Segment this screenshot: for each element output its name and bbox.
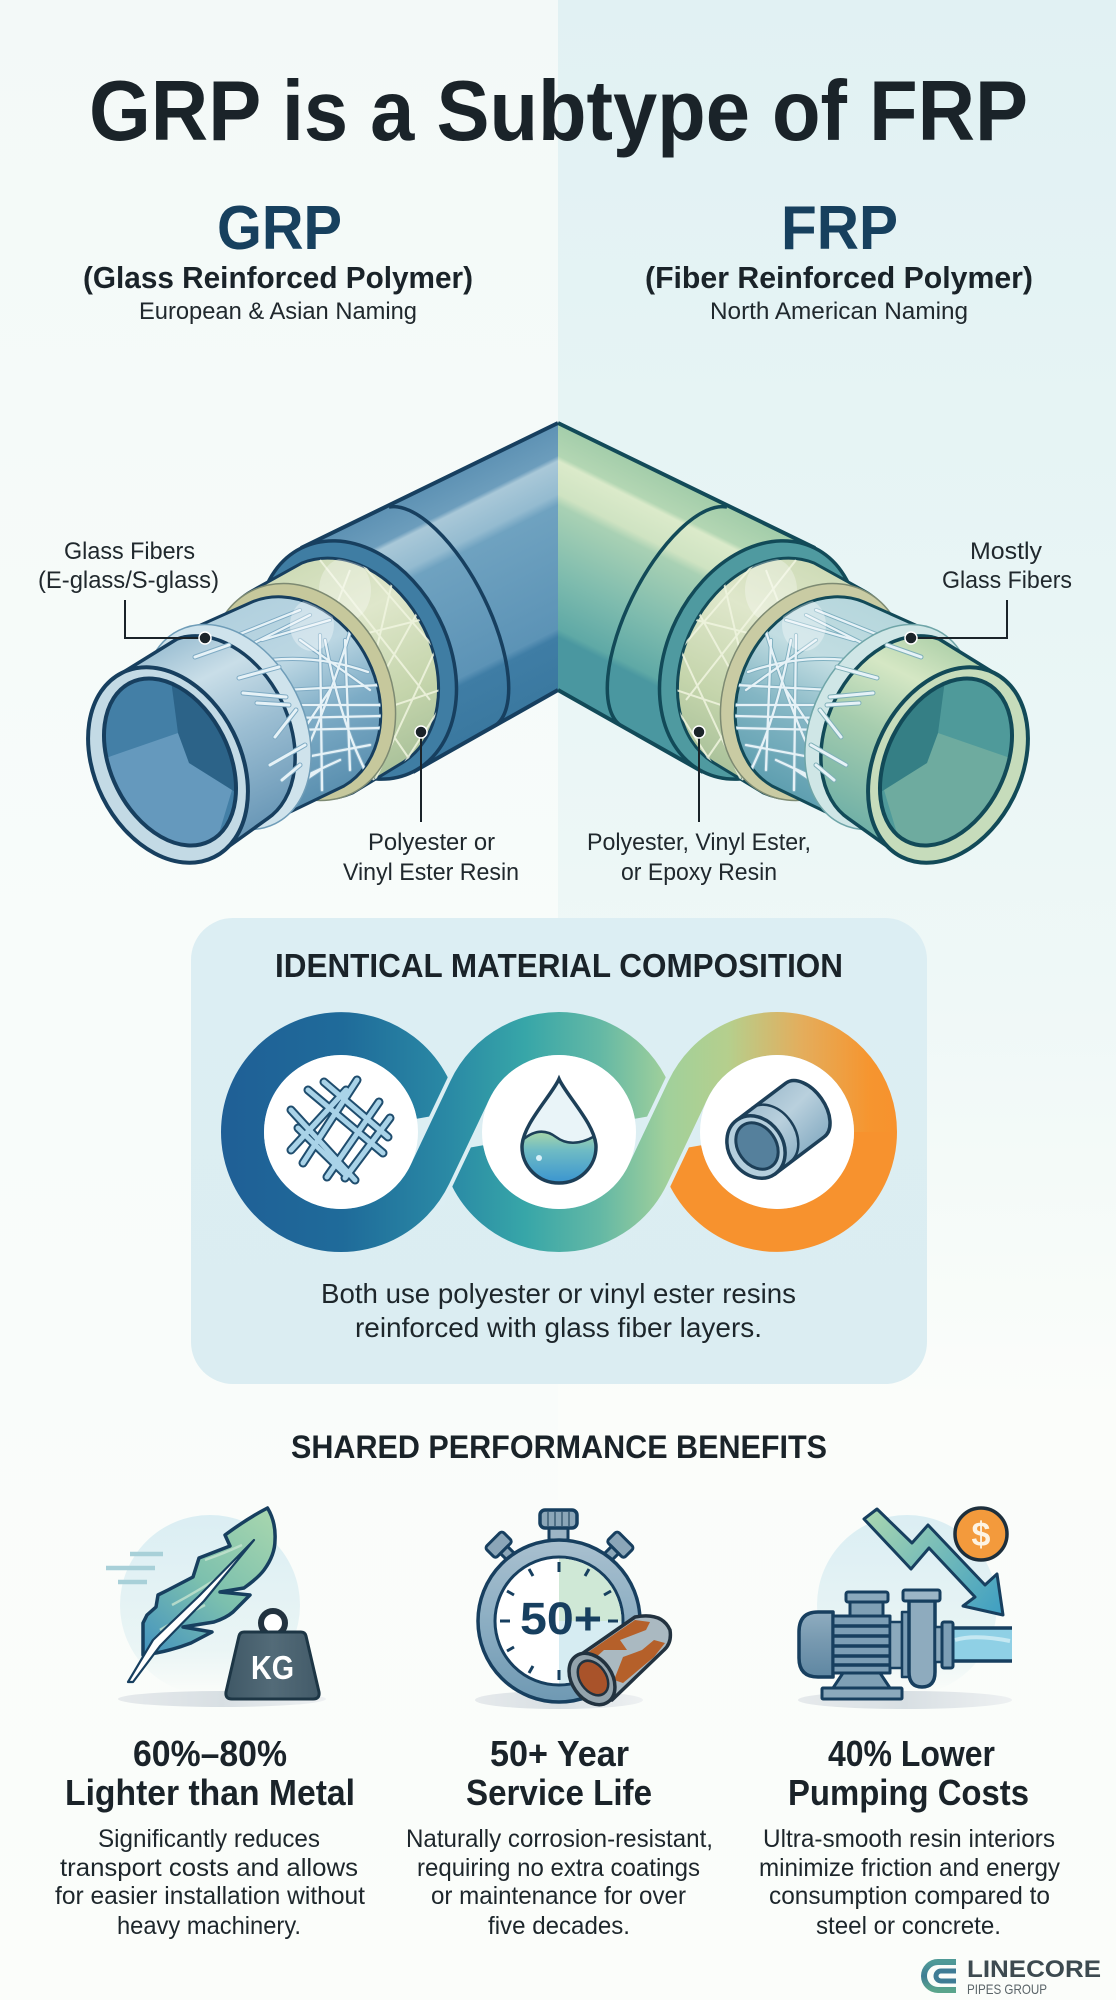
benefit: lighter than metal: Lighter than Metal <box>65 1772 355 1813</box>
icon: pipe <box>700 1055 854 1209</box>
benefit: lighter than metal: heavy machinery. <box>117 1912 301 1940</box>
icon: pump with falling cost arrow: $ <box>972 1516 991 1554</box>
callout: GRP resin <box>343 726 519 886</box>
callout: GRP resin: Vinyl Ester Resin <box>343 859 519 886</box>
benefit: service life: five decades. <box>488 1912 630 1940</box>
heading block: FRP: FRP <box>781 194 898 263</box>
benefit: service life: Naturally corrosion-resistant, <box>406 1825 713 1853</box>
logo: Linecore Pipes Group: LINECORE <box>967 1956 1101 1983</box>
benefit: service life: Service Life <box>466 1772 652 1813</box>
heading block: GRP: GRP <box>217 194 342 263</box>
benefit: pumping costs: Pumping Costs <box>788 1772 1029 1813</box>
panel heading: IDENTICAL MATERIAL COMPOSITION <box>275 947 843 984</box>
benefit: pumping costs: steel or concrete. <box>816 1912 1001 1940</box>
icon: feather and weight: KG <box>251 1649 294 1686</box>
benefit: lighter than metal: transport costs and allows <box>60 1854 358 1882</box>
benefit: service life: 50+ Year <box>490 1733 629 1774</box>
icon: feather and weight <box>106 1508 326 1707</box>
panel caption: reinforced with glass fiber layers. <box>355 1312 762 1343</box>
callout: GRP resin: Polyester or <box>368 829 495 856</box>
panel caption: Both use polyester or vinyl ester resins <box>321 1278 796 1309</box>
icon: glass fibers <box>264 1055 418 1209</box>
callout: GRP glass fibers: (E-glass/S-glass) <box>38 567 219 594</box>
benefit: service life: or maintenance for over <box>431 1882 686 1910</box>
heading block: FRP: (Fiber Reinforced Polymer) <box>645 260 1033 295</box>
title: GRP is a Subtype of FRP <box>89 64 1028 159</box>
heading block: GRP: European & Asian Naming <box>139 298 417 325</box>
icon: stopwatch and corroded pipe <box>475 1510 670 1713</box>
benefit: service life: requiring no extra coatings <box>417 1854 700 1882</box>
heading block: GRP <box>83 194 473 325</box>
benefit: lighter than metal: 60%–80% <box>133 1733 287 1774</box>
panel: identical material composition <box>191 918 927 1384</box>
icon: pump with falling cost arrow <box>798 1508 1012 1709</box>
callout: FRP resin: Polyester, Vinyl Ester, <box>587 829 811 856</box>
callout: FRP glass fibers: Glass Fibers <box>942 567 1072 594</box>
callout: FRP glass fibers <box>905 538 1072 644</box>
panel caption <box>321 1278 796 1343</box>
icon: resin drop <box>482 1055 636 1209</box>
benefit: lighter than metal: Significantly reduces <box>98 1825 320 1853</box>
benefit: pumping costs: consumption compared to <box>769 1882 1050 1910</box>
benefit: lighter than metal: for easier installation without <box>55 1882 365 1910</box>
pipe diagram: GRP arm <box>86 421 558 865</box>
pipe diagram: FRP arm <box>558 421 1030 865</box>
heading: shared performance benefits: SHARED PERFORMANCE BENEFITS <box>291 1429 827 1465</box>
benefit: pumping costs <box>759 1733 1060 1940</box>
callout: GRP glass fibers <box>38 538 219 644</box>
callout: FRP glass fibers: Mostly <box>970 538 1042 565</box>
callout: FRP resin <box>587 726 811 886</box>
logo: Linecore Pipes Group <box>924 1956 1101 1997</box>
benefit: pumping costs: minimize friction and energy <box>759 1854 1060 1882</box>
benefit: service life <box>406 1733 713 1940</box>
benefit: lighter than metal <box>55 1733 365 1940</box>
logo: Linecore Pipes Group: PIPES GROUP <box>967 1981 1047 1997</box>
callout: GRP glass fibers: Glass Fibers <box>64 538 195 565</box>
icon: stopwatch and corroded pipe: 50+ <box>520 1593 602 1644</box>
infinity ribbon <box>242 1034 876 1230</box>
heading block: FRP: North American Naming <box>710 298 968 325</box>
heading block: FRP <box>645 194 1033 325</box>
heading block: GRP: (Glass Reinforced Polymer) <box>83 260 473 295</box>
callout: FRP resin: or Epoxy Resin <box>621 859 777 886</box>
benefit: pumping costs: Ultra-smooth resin interiors <box>763 1825 1055 1853</box>
benefit: pumping costs: 40% Lower <box>828 1733 995 1774</box>
